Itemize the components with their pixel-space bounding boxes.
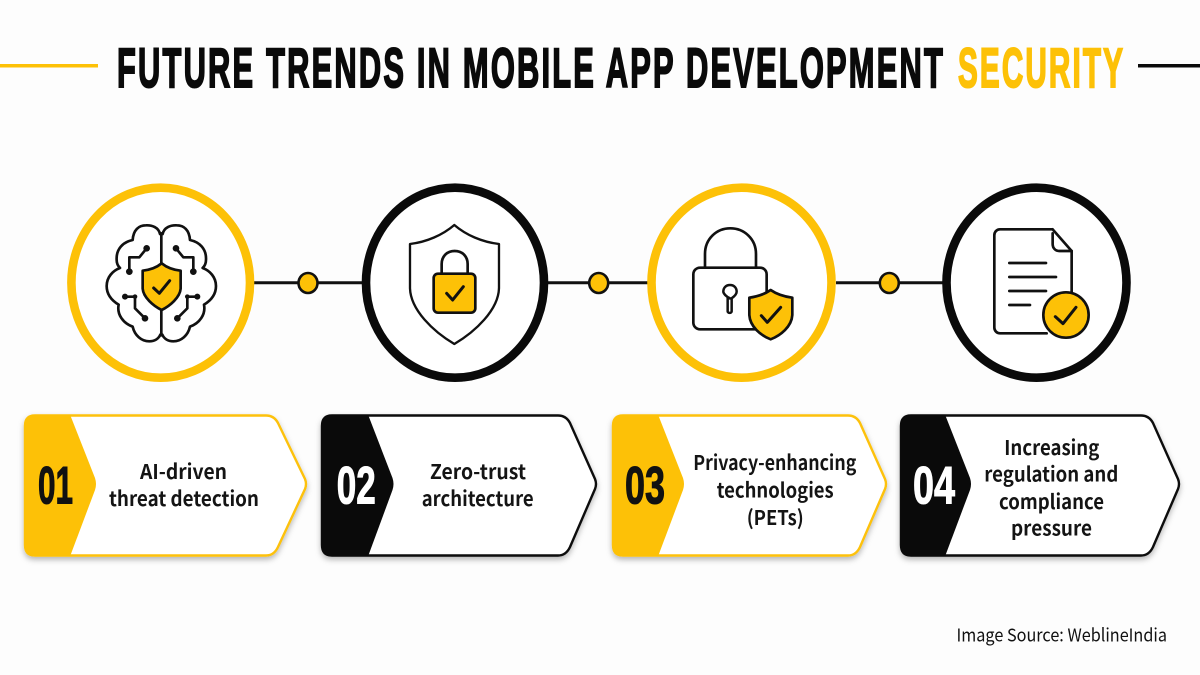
label 02: Zero-trust — [430, 455, 526, 485]
connector 3 — [836, 273, 943, 293]
number 03: 03 — [625, 456, 665, 516]
label 04: Increasing — [1004, 431, 1099, 461]
card 01 — [24, 414, 306, 556]
label 03 — [693, 446, 856, 531]
connector 1 — [254, 273, 362, 293]
label 01: AI-driven — [139, 455, 227, 485]
label 01 — [109, 455, 259, 512]
tab 03 — [612, 414, 684, 556]
number 01: 01 — [38, 456, 73, 516]
card 02 — [322, 414, 596, 556]
label 02 — [422, 455, 534, 512]
card 04 — [900, 414, 1179, 556]
tab 02 — [322, 414, 394, 556]
label 02: architecture — [422, 482, 534, 512]
icon: shield with padlock — [410, 225, 499, 344]
label 01: threat detection — [109, 482, 259, 512]
number 02: 02 — [337, 456, 376, 516]
label 03: Privacy-enhancing — [693, 446, 856, 476]
label 03: (PETs) — [747, 501, 804, 531]
icon: padlock with shield — [693, 228, 792, 339]
icon: document with check — [994, 229, 1089, 338]
circle 1: AI brain — [71, 188, 250, 378]
label 03: technologies — [717, 473, 834, 503]
tab 04 — [900, 414, 971, 556]
tab 01 — [24, 414, 96, 556]
connector 2 — [548, 273, 648, 293]
circle 4: compliance — [946, 188, 1126, 378]
card 03 — [612, 414, 886, 556]
icon: brain with shield — [107, 225, 216, 341]
circle 2: zero-trust — [366, 188, 544, 378]
label 04 — [984, 431, 1118, 542]
label 04: compliance — [999, 485, 1104, 515]
circle 3: privacy — [652, 188, 832, 378]
label 04: pressure — [1011, 512, 1092, 542]
label 04: regulation and — [984, 458, 1118, 488]
image source credit: Image Source: WeblineIndia — [956, 622, 1167, 648]
number 04: 04 — [913, 456, 955, 516]
